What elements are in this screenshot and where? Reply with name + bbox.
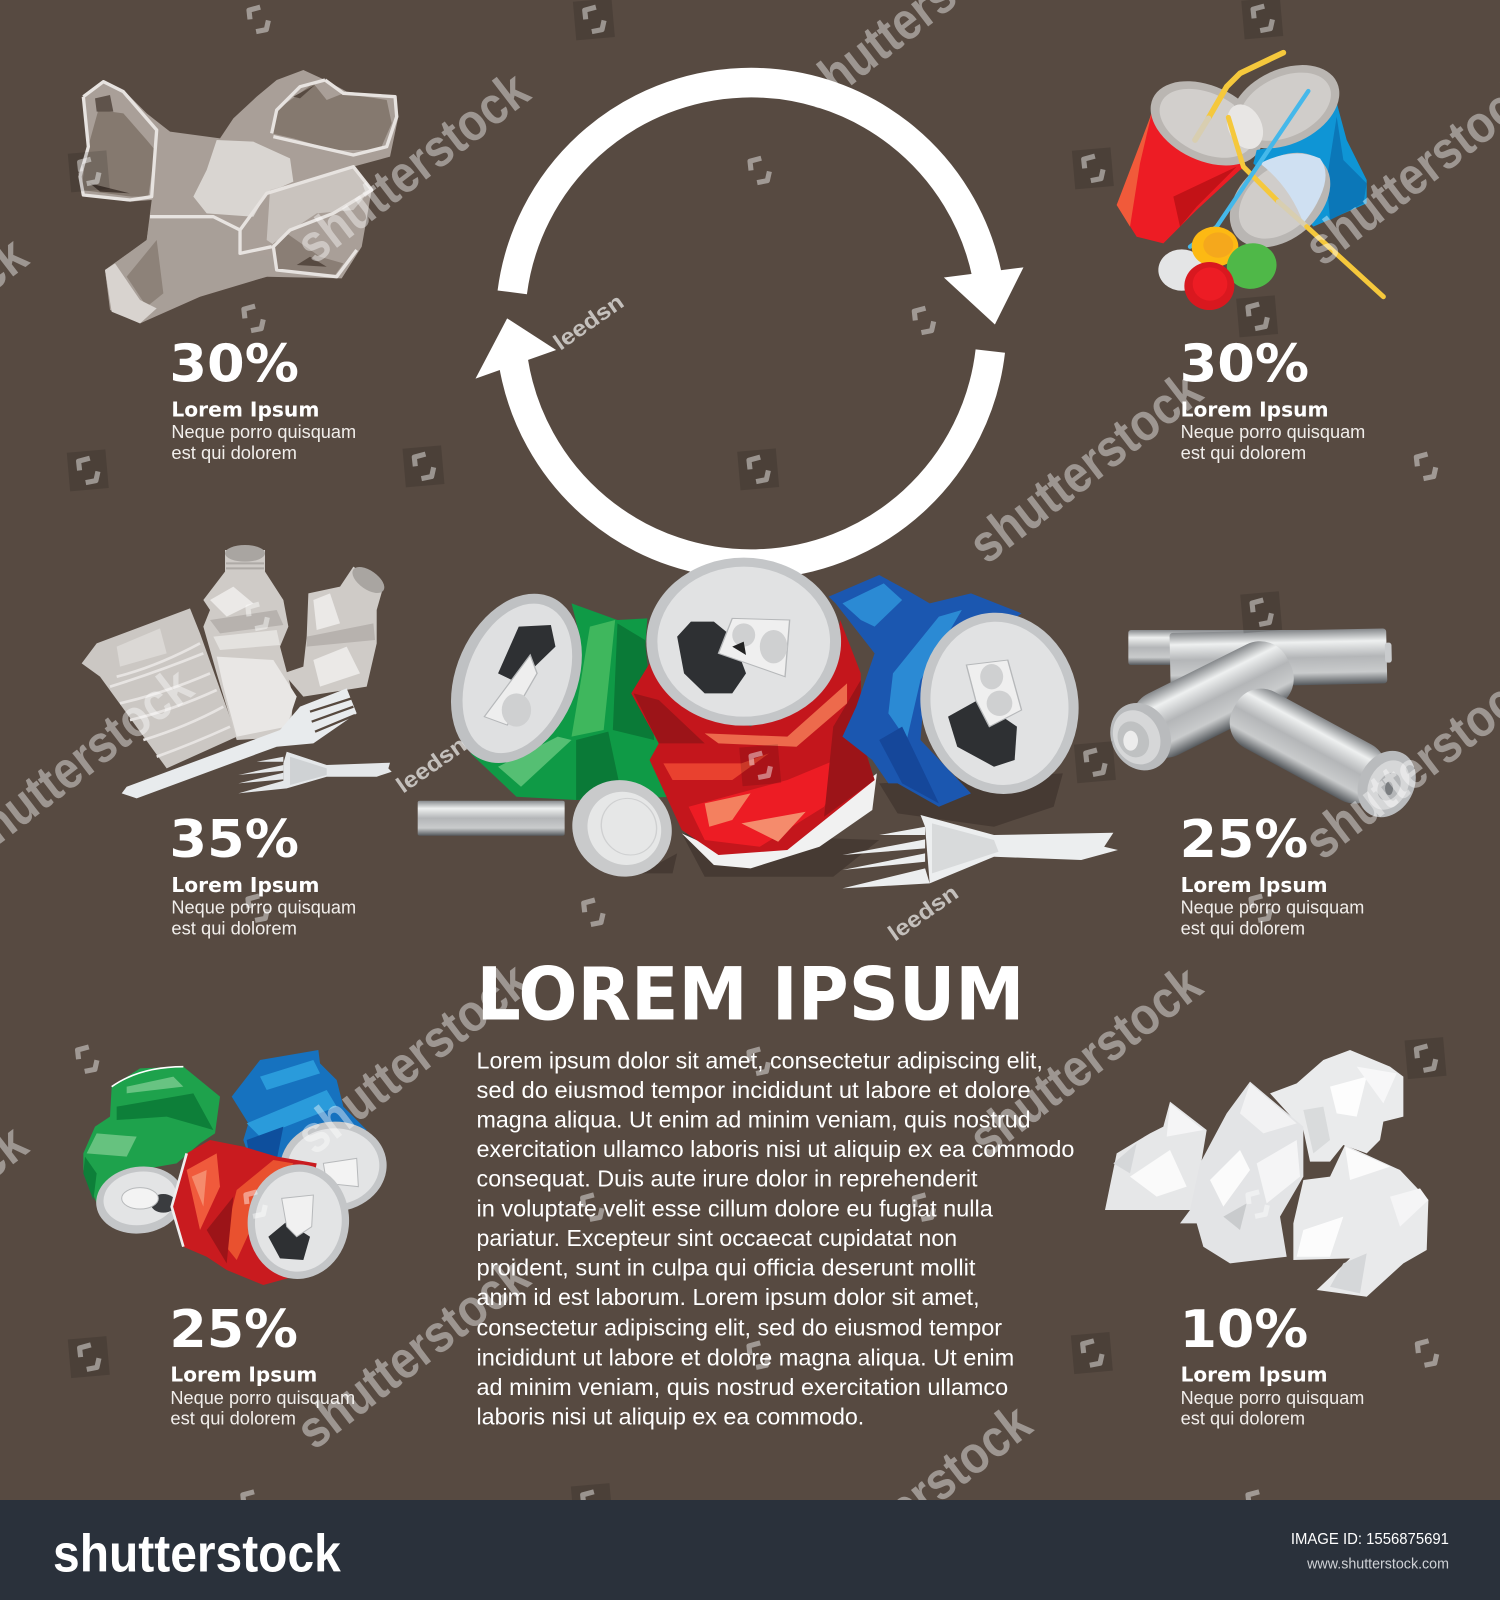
recycling arrows [476,83,1023,564]
stat: paper 10%: est qui dolorem [1181,1407,1305,1428]
stat: paper 10% [1180,1300,1364,1428]
watermark text: shutterstock [958,360,1213,575]
footer logo: shutterstock [53,1524,341,1583]
green can [431,585,675,800]
paper ball left [1105,1102,1207,1210]
body text: Lorem ipsum dolor sit amet, consectetur adipiscing elit, [477,1047,1043,1073]
tube end right [1346,741,1427,827]
stat: tubes 25%: est qui dolorem [1181,918,1305,939]
bottle [283,562,389,697]
icon: crushed cups, straws and caps [1117,49,1383,310]
stat: plastic bags 30%: est qui dolorem [171,442,297,463]
stat: cups 30% [1180,335,1365,463]
paper ball centre [1180,1082,1303,1263]
stat: paper 10%: Neque porro quisquam [1181,1387,1364,1408]
stat: plastic bags 30% [169,335,356,463]
body text: in voluptate velit esse cillum dolore eu fugiat nulla [477,1195,994,1221]
bottle cap [567,777,677,880]
body text: exercitation ullamco laboris nisi ut aliquip ex ea commodo [477,1136,1074,1162]
stat: tubes 25% [1180,810,1364,939]
stat: cans 25% [169,1300,355,1428]
arrow: lower arc [476,318,990,564]
stat: bottles 35%: 35% [169,810,299,870]
stat: tubes 25%: Neque porro quisquam [1181,896,1364,917]
crushed plastic cup [82,608,237,768]
tube end left [1099,693,1182,781]
title: LOREM IPSUM [477,952,1024,1037]
fork small [238,752,392,793]
body text: sed do eiusmod tempor incididunt ut labore et dolore [477,1077,1031,1103]
stat: cups 30%: 30% [1180,335,1309,395]
body text: ad minim veniam, quis nostrud exercitation ullamco [477,1374,1008,1400]
body text: pariatur. Excepteur sint occaecat cupidatat non [477,1225,957,1251]
body text: proident, sunt in culpa qui officia deserunt mollit [477,1255,976,1281]
stat: bottles 35% [169,810,356,939]
bottle [203,545,293,740]
paper ball right [1293,1145,1428,1297]
red can [172,1140,354,1285]
watermark text: shutterstock [286,60,541,275]
icon: plastic bag [78,70,398,323]
plastic fork [842,815,1118,888]
stat: bottles 35%: Lorem Ipsum [171,873,319,897]
stat: bottles 35%: Neque porro quisquam [171,896,356,917]
shadows [640,773,1063,877]
footer url: www.shutterstock.com [1306,1556,1449,1572]
watermark text: shutterstock [286,951,541,1166]
green can [83,1067,220,1239]
body text: magna aliqua. Ut enim ad minim veniam, quis nostrud [477,1107,1031,1133]
body text: laboris nisi ut aliquip ex ea commodo. [477,1403,864,1429]
crumpled centre [217,657,297,737]
fork large [122,688,357,798]
watermark text: shutterstock [958,954,1213,1169]
red can [631,558,877,868]
stat: plastic bags 30%: Neque porro quisquam [171,421,356,442]
loose lid [1211,133,1349,267]
stat: plastic bags 30%: Lorem Ipsum [171,397,319,421]
stat: tubes 25%: 25% [1180,810,1308,870]
stat: paper 10%: 10% [1180,1300,1308,1360]
icon: crushed cans lower left [83,1050,390,1285]
body text: consectetur adipiscing elit, sed do eiusmod tempor [477,1315,1002,1341]
stat: cups 30%: Lorem Ipsum [1181,397,1329,421]
straws [1190,53,1383,297]
red cup [1117,64,1276,243]
icon: crumpled paper [1105,1050,1428,1297]
icon: crushed aluminium cans centre [418,558,1118,888]
body text: consequat. Duis aute irure dolor in reprehenderit [477,1166,978,1192]
body text: incididunt ut labore et dolore magna aliqua. Ut enim [477,1344,1014,1370]
aluminium tube [418,801,565,836]
paper ball top [1270,1050,1403,1162]
stat: plastic bags 30%: 30% [169,335,299,395]
arrow: upper arc [512,83,1023,324]
stat: cans 25%: 25% [169,1300,298,1360]
watermark text: leedsn [392,732,471,798]
stat: cans 25%: Lorem Ipsum [170,1363,317,1387]
footer band [0,1500,1500,1600]
body text: anim id est laborum. Lorem ipsum dolor sit amet, [477,1284,980,1310]
image id: IMAGE ID: 1556875691 [1291,1531,1449,1548]
watermark text: leedsn [549,289,628,355]
blue can [829,575,1085,807]
stat: cans 25%: est qui dolorem [170,1407,296,1428]
stat: bottles 35%: est qui dolorem [171,918,297,939]
blue cup [1217,49,1367,227]
icon: plastic bottles, cup and forks [82,545,392,798]
body text [477,1047,1074,1429]
stat: cups 30%: Neque porro quisquam [1181,421,1365,442]
stat: cans 25%: Neque porro quisquam [170,1387,355,1408]
blue can [232,1050,390,1216]
watermark text: shutterstock [286,1246,541,1461]
stat: cups 30%: est qui dolorem [1181,442,1306,463]
bottle caps [1158,227,1282,310]
stat: tubes 25%: Lorem Ipsum [1181,873,1328,897]
stat: paper 10%: Lorem Ipsum [1181,1363,1328,1387]
icon: aluminium tubes [1099,628,1427,827]
watermark text: leedsn [883,880,963,946]
